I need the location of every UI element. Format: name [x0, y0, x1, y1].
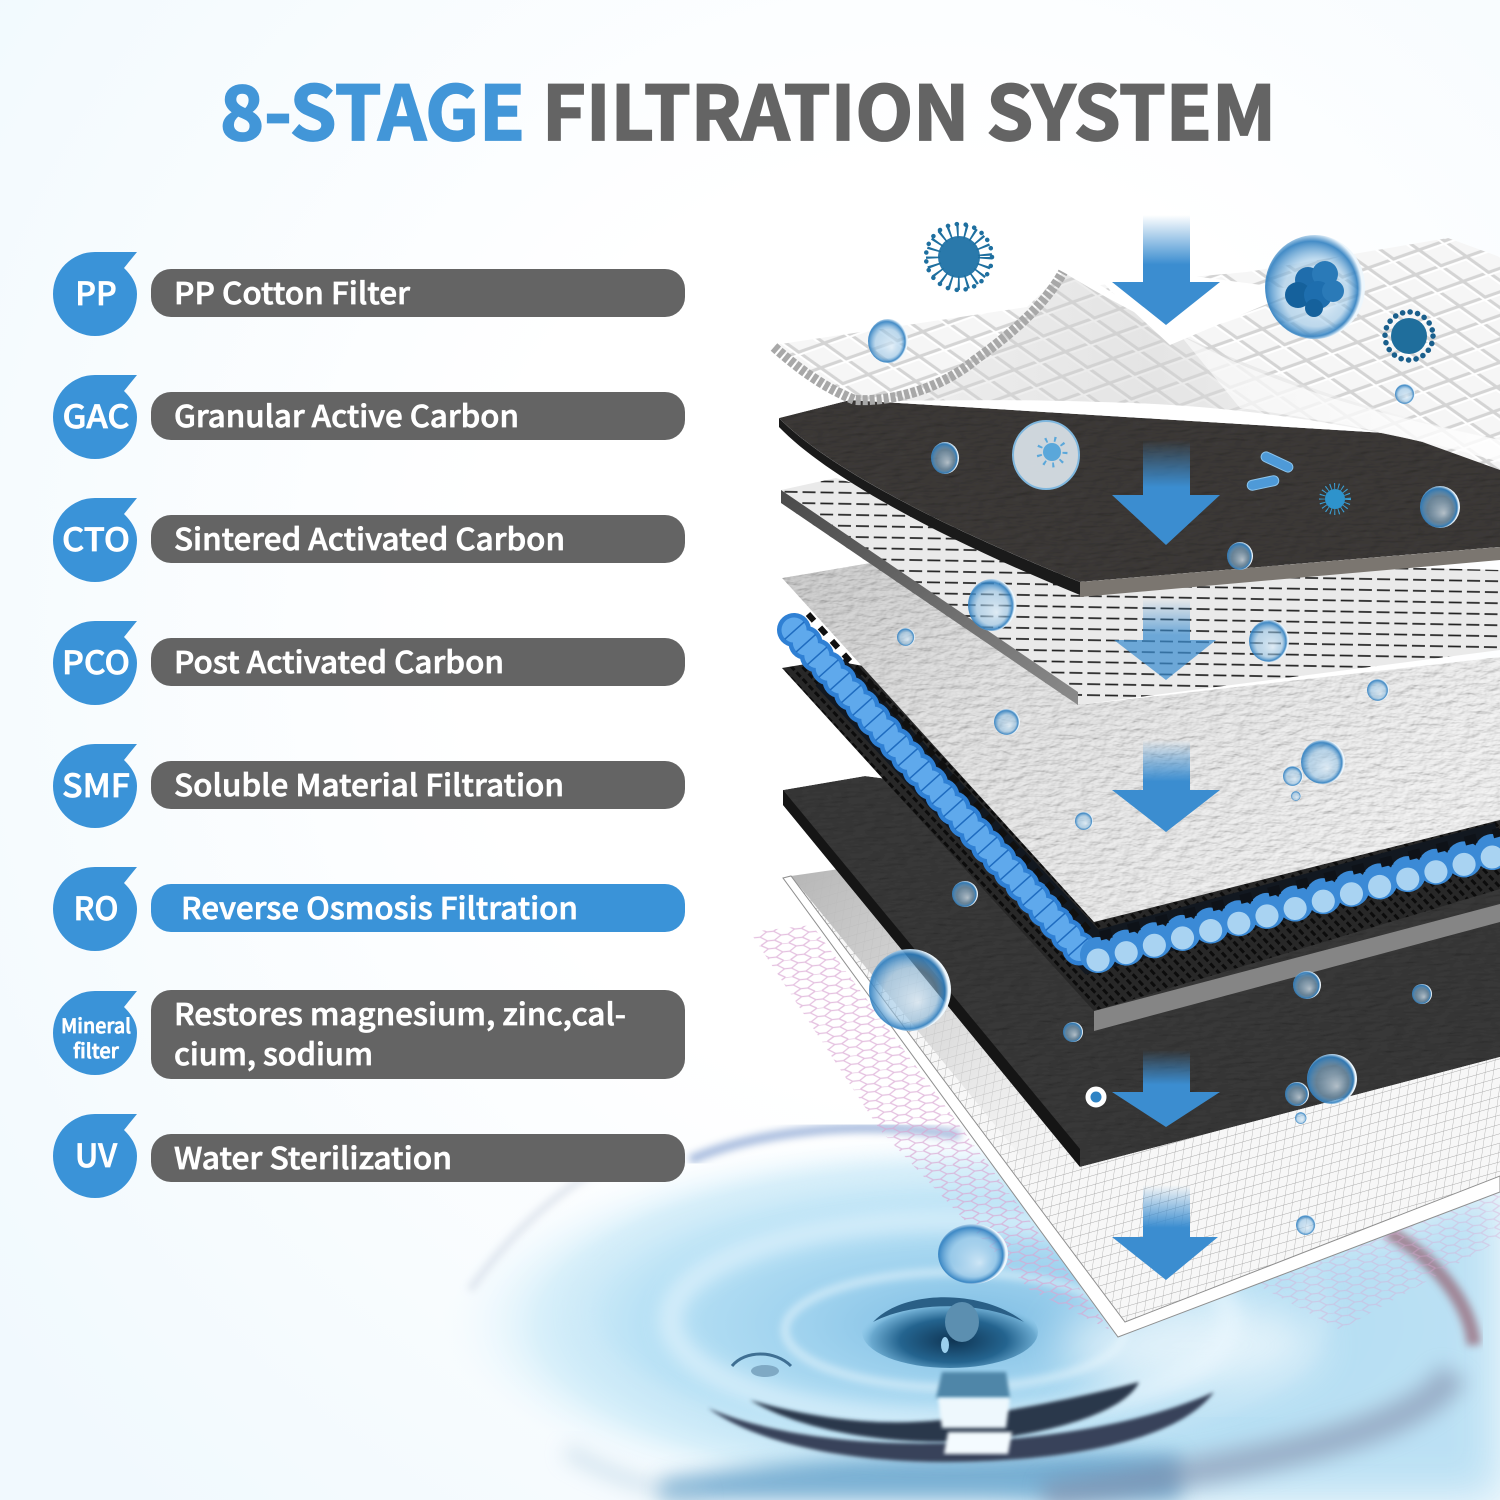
title — [220, 53, 1276, 162]
title: FILTRATION SYSTEM — [542, 53, 1276, 162]
filter layer 5: black mesh sheet — [782, 660, 1500, 1011]
stage: SMF — [53, 744, 685, 828]
icon: bacteria capsules — [1246, 450, 1295, 491]
arrow 6 — [1112, 1185, 1218, 1280]
stage: Mineral filter — [53, 990, 685, 1079]
stage: PP — [53, 252, 685, 336]
arrow 5 — [1112, 1050, 1220, 1127]
arrow 3 — [1114, 598, 1216, 680]
icon: virus small — [1322, 486, 1348, 512]
stage: UV — [53, 1114, 685, 1198]
filter layer 2: woven mesh sheet — [781, 478, 1500, 705]
stage: PCO — [53, 621, 685, 705]
stage: CTO: CTO — [62, 515, 130, 561]
filter layer 8: white grid sheet with pink hex mesh — [750, 866, 1500, 1337]
stage: GAC: Granular Active Carbon — [174, 392, 519, 436]
stage list — [53, 252, 685, 1198]
stage: PP: PP — [75, 269, 117, 315]
stage: SMF: Soluble Material Filtration — [174, 761, 564, 805]
stage: UV: Water Sterilization — [174, 1134, 452, 1178]
filter layer 7: dark carbon sheet — [783, 776, 1500, 1167]
title: 8-STAGE — [220, 53, 525, 162]
stage: GAC — [53, 375, 685, 459]
stage: Mineral filter: cium, sodium — [174, 1030, 373, 1074]
stage: SMF: SMF — [62, 761, 130, 807]
stage: UV: UV — [75, 1131, 118, 1177]
filter layer 4: blue coil membrane — [794, 614, 1500, 960]
filter layer 0: quilted white sheet with curl — [774, 238, 1500, 470]
filter layer 6: thin grey sheet — [1094, 904, 1500, 1031]
stage: RO: RO — [73, 884, 119, 930]
stage: CTO — [53, 498, 685, 582]
icon: bubble with virus — [1013, 421, 1079, 489]
icon: bubble with blue cluster — [1265, 235, 1365, 339]
filter layer 1: dark carbon sheet — [779, 400, 1500, 597]
stage: CTO: Sintered Activated Carbon — [174, 515, 565, 559]
stage: Mineral filter: Restores magnesium, zinc,cal- — [174, 990, 626, 1034]
water bubbles — [868, 319, 1460, 1284]
stage: PCO: Post Activated Carbon — [174, 638, 504, 682]
stage: RO — [53, 867, 685, 951]
stage: RO: Reverse Osmosis Filtration — [181, 884, 578, 928]
arrow 2 — [1112, 440, 1220, 545]
filter layer 3: white textured paper — [782, 563, 1500, 922]
stage: PCO: PCO — [62, 638, 130, 684]
icon: virus large — [926, 224, 992, 290]
water ripple photo — [430, 1110, 1500, 1500]
stage: GAC: GAC — [62, 392, 130, 438]
icon: virus medium — [1385, 312, 1433, 360]
stage: Mineral filter: filter — [73, 1035, 120, 1064]
arrow 4 — [1112, 740, 1220, 832]
stage: Mineral filter: Mineral — [61, 1010, 131, 1039]
arrow 1 — [1112, 215, 1220, 325]
stage: PP: PP Cotton Filter — [174, 269, 411, 313]
